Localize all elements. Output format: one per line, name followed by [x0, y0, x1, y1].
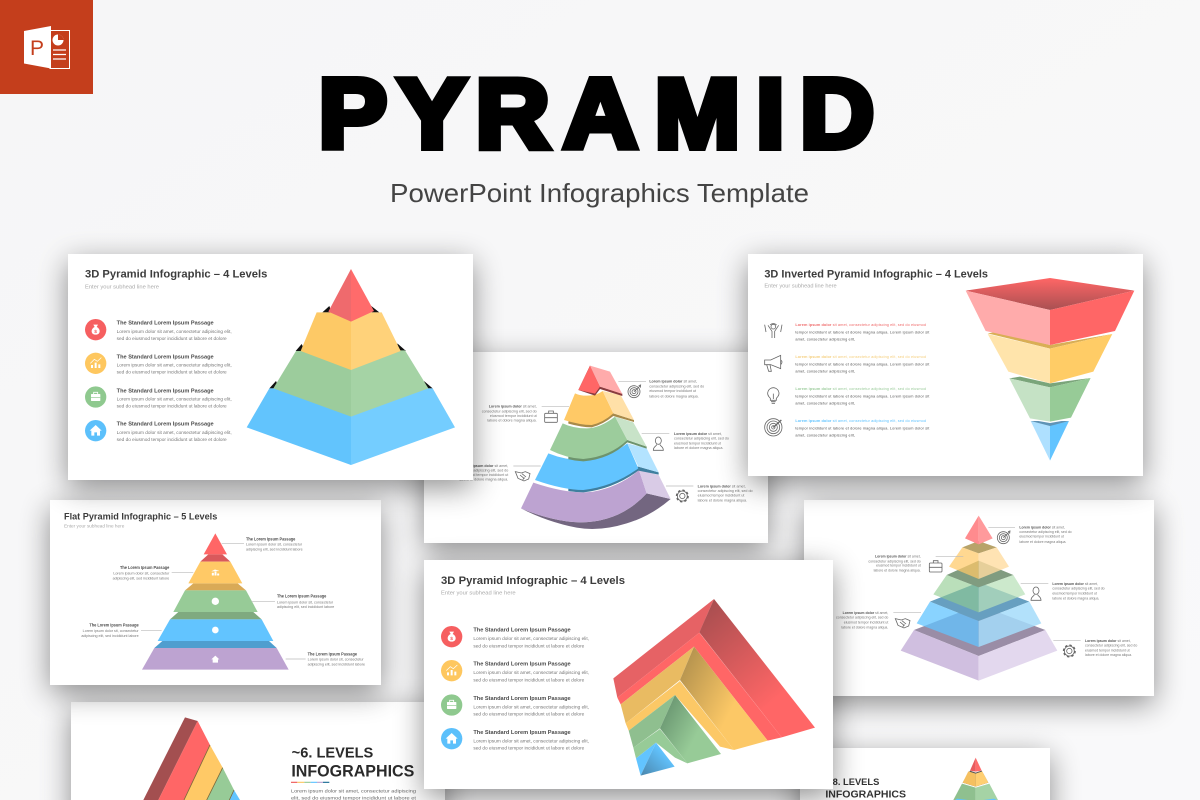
text: level 1 note: Lorem ipsum dolor sit amet, [1019, 525, 1065, 529]
icon: megaphone [765, 355, 782, 371]
text: inverted level 2: Lorem ipsum dolor sit amet, consectetur adipiscing elit, sed do eiusmod [795, 355, 926, 359]
icon: handshake [515, 472, 530, 481]
panel: bottom-left 6 levels slide: ~6. LEVELS [292, 746, 374, 762]
text: flat level 4: Lorem ipsum dolor sit, consectetur [83, 629, 139, 633]
text: inverted level 1: Lorem ipsum dolor sit amet, consectetur adipiscing elit, sed do eiusmod [795, 323, 926, 327]
text: curved level 1: labore et dolore magna aliqua. [649, 394, 699, 398]
icon: target [765, 419, 782, 436]
text: curved level 3: labore et dolore magna aliqua. [674, 446, 723, 450]
icon: target [628, 385, 641, 398]
icon: money bag: $ [94, 329, 97, 335]
text: curved level 1: Lorem ipsum dolor sit amet, [649, 380, 697, 384]
text: row 4: Lorem ipsum dolor sit amet, consectetur adipiscing elit, [117, 430, 232, 435]
text: level 3 note [1052, 582, 1105, 600]
text: level 2 note: consectetur adipiscing elit, sed do [868, 559, 921, 563]
text: row 1: Lorem ipsum dolor sit amet, consectetur adipiscing elit, [473, 636, 589, 641]
text: flat level 5: Lorem ipsum dolor sit, consectetur [308, 658, 364, 662]
panel: inverted pyramid slide [748, 254, 1143, 476]
chart: rotated stepped pyramid [613, 599, 815, 776]
text: level 4 note: consectetur adipiscing elit, sed do [836, 616, 888, 620]
icon: house [85, 420, 106, 441]
text: row 2: The Standard Lorem Ipsum Passage [117, 354, 214, 360]
PowerPoint badge: P [30, 37, 44, 60]
text: level 1 note: eiusmod tempor incididunt ut [1019, 535, 1064, 539]
text: level 3 note: eiusmod tempor incididunt ut [1052, 591, 1097, 595]
text: row 1: sed do eiusmod tempor incididunt ut labore et dolore [473, 643, 585, 648]
icon: money bag [441, 626, 462, 647]
text: level 2 note: labore et dolore magna aliqua. [874, 569, 921, 573]
text: flat level 5 [308, 651, 365, 666]
text: curved level 5: Lorem ipsum dolor sit amet, [698, 484, 746, 488]
subtitle: PowerPoint Infographics Template [390, 178, 809, 208]
text: row 4: The Standard Lorem Ipsum Passage [117, 422, 214, 428]
text: inverted level 4: tempor incididunt ut labore et dolore magna aliqua. Lorem ipsum dolor sit [795, 426, 930, 430]
text: row 3: The Standard Lorem Ipsum Passage [473, 696, 571, 702]
icon: gear [677, 490, 688, 502]
PowerPoint badge [0, 0, 93, 94]
text: flat level 1: Lorem ipsum dolor sit, consectetur [246, 543, 303, 547]
text: inverted level 2: tempor incididunt ut labore et dolore magna aliqua. Lorem ipsum dolor sit [795, 362, 930, 366]
text: flat level 4: adipiscing elit, sed incididunt labore [81, 634, 139, 638]
text: curved level 1 [649, 380, 704, 398]
text: level 1 note: labore et dolore magna aliqua. [1019, 540, 1066, 544]
text: flat level 2: The Lorem Ipsum Passage [120, 565, 170, 570]
icon: handshake [895, 619, 910, 628]
text: flat level 2: Lorem ipsum dolor sit, consectetur [113, 572, 170, 576]
panel: 3D pyramid slide center-bottom [424, 560, 833, 789]
text: inverted level 4: amet, consectetur adipiscing elit, [795, 434, 855, 438]
text: inverted level 4 [795, 419, 930, 438]
text: flat level 4: The Lorem Ipsum Passage [89, 623, 139, 628]
chart: curved pyramid [521, 366, 671, 529]
text: row 3: sed do eiusmod tempor incididunt ut labore et dolore [473, 712, 585, 717]
text: curved level 5: consectetur adipiscing elit, sed do [698, 489, 753, 493]
text: curved level 2: labore et dolore magna aliqua. [487, 419, 537, 423]
text: flat level 3: The Lorem Ipsum Passage [277, 594, 327, 599]
chart: 3D pyramid [247, 269, 455, 465]
heading: Flat Pyramid Infographic – 5 Levels [64, 512, 217, 522]
text: curved level 2: eiusmod tempor incididunt ut [490, 414, 537, 418]
text: curved level 2: Lorem ipsum dolor sit amet, [489, 405, 537, 409]
text: inverted level 1: amet, consectetur adipiscing elit, [795, 338, 855, 342]
text: curved level 5: labore et dolore magna aliqua. [698, 498, 747, 502]
icon: light bulb [768, 388, 779, 403]
icon: money bag: $ [450, 636, 453, 642]
text: row 4 [473, 730, 589, 751]
text: row 4: sed do eiusmod tempor incididunt ut labore et dolore [473, 746, 585, 751]
icon: target [997, 531, 1010, 544]
text: row 1 [117, 321, 232, 341]
text: row 3 [473, 696, 589, 717]
text: flat level 3: Lorem ipsum dolor sit, consectetur [277, 600, 334, 604]
panel: bottom-left 6 levels slide: INFOGRAPHICS [291, 762, 414, 781]
text: level 2 note: eiusmod tempor incididunt ut [876, 564, 921, 568]
text: flat level 3 [277, 594, 334, 609]
text: row 4: sed do eiusmod tempor incididunt ut labore et dolore [117, 437, 227, 442]
panel: bottom-right 8 levels slide [800, 748, 1050, 800]
text: flat level 4 [81, 623, 139, 638]
text: level 5 note: consectetur adipiscing elit, sed do [1085, 644, 1137, 648]
icon: person [1031, 587, 1041, 600]
panel: bottom-left 6 levels slide: Lorem ipsum dolor sit amet, consectetur adipiscing [291, 788, 416, 793]
text: curved level 4: Lorem ipsum dolor sit amet, [460, 464, 508, 468]
text: flat level 1 [246, 536, 303, 551]
icon: briefcase [929, 561, 942, 572]
text: inverted level 1: tempor incididunt ut labore et dolore magna aliqua. Lorem ipsum dolor sit [795, 330, 930, 334]
icon: house [441, 728, 462, 749]
icon: briefcase [441, 694, 462, 716]
text: level 5 note: labore et dolore magna aliqua. [1085, 653, 1132, 657]
text: inverted level 4: Lorem ipsum dolor sit amet, consectetur adipiscing elit, sed do eiusmod [795, 419, 926, 423]
text: flat level 5: The Lorem Ipsum Passage [308, 651, 358, 656]
text: level 4 note: Lorem ipsum dolor sit amet, [843, 611, 888, 615]
text: row 2: Lorem ipsum dolor sit amet, consectetur adipiscing elit, [473, 670, 589, 675]
text: level 5 note [1085, 639, 1137, 657]
text: level 1 note [1019, 525, 1072, 544]
text: flat level 2 [113, 565, 170, 580]
text: row 1: Lorem ipsum dolor sit amet, consectetur adipiscing elit, [117, 329, 232, 334]
text: curved level 1: consectetur adipiscing elit, sed do [649, 384, 704, 388]
subheading: Enter your subhead line here [64, 524, 125, 529]
text: inverted level 3: amet, consectetur adipiscing elit, [795, 402, 855, 406]
text: curved level 5 [698, 484, 753, 502]
heading: 3D Inverted Pyramid Infographic – 4 Levels [764, 268, 988, 280]
text: flat level 1: adipiscing elit, sed incididunt labore [246, 547, 303, 551]
text: row 2: sed do eiusmod tempor incididunt ut labore et dolore [473, 677, 585, 682]
text: inverted level 3 [795, 387, 930, 406]
chart: translucent 3D pyramid [901, 516, 1057, 681]
text: curved level 3: Lorem ipsum dolor sit amet, [674, 432, 722, 436]
text: row 4: The Standard Lorem Ipsum Passage [473, 730, 571, 736]
panel: flat pyramid 5 levels slide [50, 500, 381, 685]
text: curved level 3: consectetur adipiscing elit, sed do [674, 437, 729, 441]
text: row 4 [117, 422, 232, 442]
text: row 1: The Standard Lorem Ipsum Passage [473, 628, 571, 634]
icon: money bag [85, 319, 106, 340]
text: flat level 5: adipiscing elit, sed incididunt labore [308, 662, 365, 666]
text: flat level 3: adipiscing elit, sed incididunt labore [277, 605, 334, 609]
text: level 5 note: Lorem ipsum dolor sit amet, [1085, 639, 1131, 643]
text: row 3: Lorem ipsum dolor sit amet, consectetur adipiscing elit, [473, 704, 589, 709]
title: PYRAMID [318, 60, 874, 169]
text: level 4 note [836, 611, 888, 629]
text: curved level 3: eiusmod tempor incididunt ut [674, 441, 721, 445]
text: inverted level 2: amet, consectetur adipiscing elit, [795, 370, 855, 374]
text: row 3: Lorem ipsum dolor sit amet, consectetur adipiscing elit, [117, 397, 232, 402]
text: curved level 2: consectetur adipiscing elit, sed do [482, 409, 537, 413]
text: row 2: The Standard Lorem Ipsum Passage [473, 662, 571, 668]
text: level 2 note: Lorem ipsum dolor sit amet, [875, 555, 921, 559]
text: row 2 [117, 354, 232, 375]
icon: growth chart [441, 660, 462, 681]
panel: bottom-left 6 levels slide [71, 702, 445, 800]
text: curved level 4: consectetur adipiscing elit, sed do [453, 469, 508, 473]
text: row 3 [117, 388, 232, 409]
text: level 2 note [868, 555, 921, 573]
icon: briefcase [85, 386, 106, 408]
text: row 1 [473, 628, 589, 648]
text: curved level 4 [453, 464, 508, 482]
text: level 3 note: consectetur adipiscing elit, sed do [1052, 587, 1105, 591]
subheading: Enter your subhead line here [764, 284, 837, 290]
text: curved level 3 [674, 432, 729, 450]
text: row 2: Lorem ipsum dolor sit amet, consectetur adipiscing elit, [117, 363, 232, 368]
heading: 3D Pyramid Infographic – 4 Levels [85, 269, 267, 281]
text: level 1 note: consectetur adipiscing elit, sed do [1019, 530, 1072, 534]
heading: 3D Pyramid Infographic – 4 Levels [441, 575, 625, 587]
chart: flat pyramid [142, 533, 289, 670]
panel: curved pyramid slide [424, 352, 768, 543]
text: level 3 note: labore et dolore magna aliqua. [1052, 596, 1099, 600]
icon: person [653, 437, 663, 450]
text: level 5 note: eiusmod tempor incididunt ut [1085, 648, 1130, 652]
text: inverted level 2 [795, 355, 930, 374]
panel: translucent pyramid slide [804, 500, 1154, 696]
text: curved level 1: eiusmod tempor incididunt ut [649, 389, 696, 393]
text: level 3 note: Lorem ipsum dolor sit amet, [1052, 582, 1098, 586]
text: row 2: sed do eiusmod tempor incididunt ut labore et dolore [117, 370, 227, 375]
text: row 3: The Standard Lorem Ipsum Passage [117, 388, 214, 394]
panel: 3D pyramid slide top-left [68, 254, 473, 480]
subheading: Enter your subhead line here [85, 284, 159, 290]
panel: bottom-right 8 levels slide: 8. LEVELS [833, 777, 879, 787]
text: row 1: sed do eiusmod tempor incididunt ut labore et dolore [117, 336, 227, 341]
text: curved level 4: labore et dolore magna aliqua. [459, 478, 508, 482]
text: flat level 1: The Lorem Ipsum Passage [246, 536, 296, 541]
text: curved level 4: eiusmod tempor incididunt ut [462, 473, 508, 477]
text: inverted level 1 [795, 323, 930, 342]
text: curved level 5: eiusmod tempor incididunt ut [698, 494, 744, 498]
text: inverted level 3: Lorem ipsum dolor sit amet, consectetur adipiscing elit, sed do eiusmod [795, 387, 926, 391]
icon: gear [1064, 645, 1075, 657]
text: row 2 [473, 662, 589, 682]
icon: growth chart [85, 353, 106, 374]
text: row 3: sed do eiusmod tempor incididunt ut labore et dolore [117, 404, 227, 409]
text: curved level 2 [482, 405, 537, 423]
text: inverted level 3: tempor incididunt ut labore et dolore magna aliqua. Lorem ipsum dolor sit [795, 394, 930, 398]
text: level 4 note: labore et dolore magna aliqua. [841, 625, 888, 629]
text: level 4 note: eiusmod tempor incididunt ut [844, 620, 888, 624]
text: flat level 2: adipiscing elit, sed incididunt labore [113, 576, 169, 580]
icon: raised hands [765, 323, 782, 338]
text: row 1: The Standard Lorem Ipsum Passage [117, 321, 214, 327]
subheading: Enter your subhead line here [441, 591, 516, 597]
text: row 4: Lorem ipsum dolor sit amet, consectetur adipiscing elit, [473, 738, 589, 743]
chart: inverted pyramid [966, 278, 1134, 461]
icon: briefcase [545, 411, 557, 422]
